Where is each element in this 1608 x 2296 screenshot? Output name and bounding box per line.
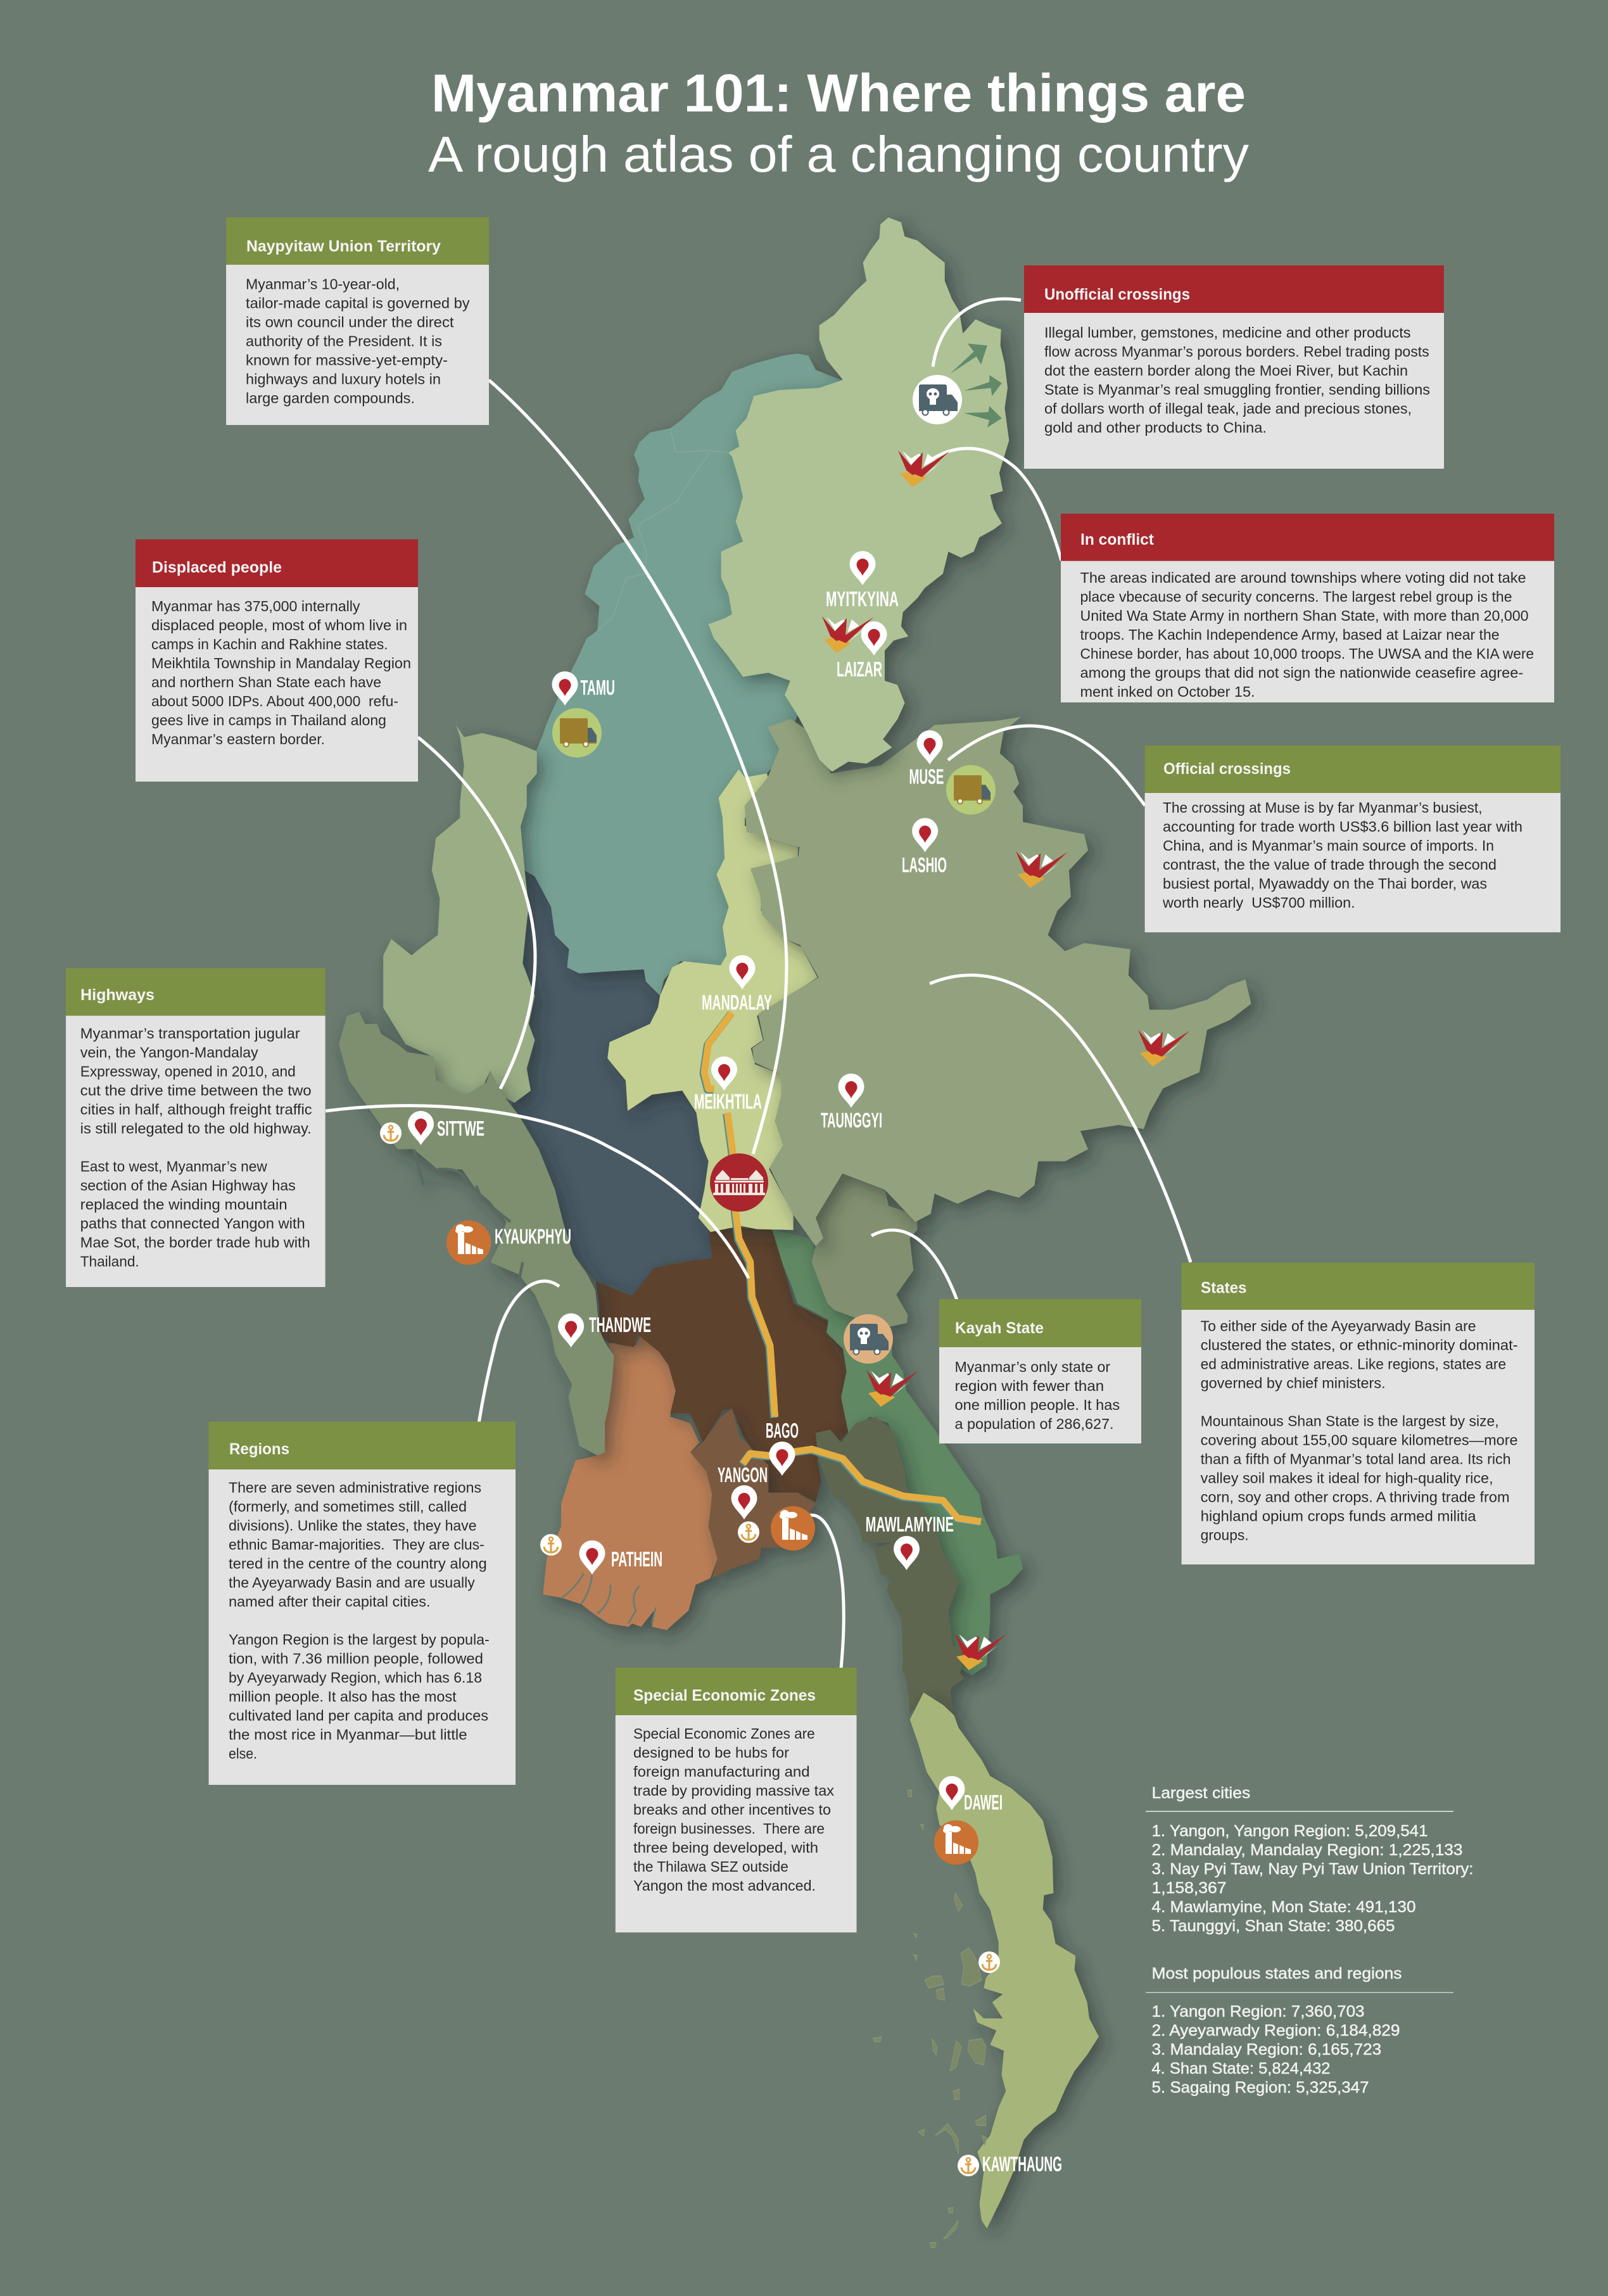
highways: [703, 1013, 981, 1523]
panel: Highways: [66, 968, 326, 1287]
city labels: MANDALAY: [702, 991, 772, 1014]
text: Displaced people body: and northern Shan State each have: [151, 674, 381, 690]
panel: Largest cities list: [1146, 1784, 1473, 1935]
city pins: [408, 551, 965, 1810]
text: Kayah State body: a population of 286,627.: [955, 1416, 1113, 1432]
text: States body: valley soil makes it ideal for high-quality rice,: [1201, 1470, 1493, 1487]
panel: Regions: [209, 1421, 516, 1785]
panel: Official crossings: [1145, 745, 1561, 932]
text: Unofficial crossings body: flow across Myanmar’s porous borders. Rebel trading posts: [1044, 343, 1429, 360]
panel: Most populous states and regions list: 3. Mandalay Region: 6,165,723: [1151, 2041, 1381, 2058]
text: Special Economic Zones body: foreign businesses. There are: [633, 1820, 825, 1837]
text: Unofficial crossings body: of dollars worth of illegal teak, jade and precious stones,: [1044, 400, 1412, 417]
text: Special Economic Zones body: [633, 1725, 834, 1894]
text: States body: corn, soy and other crops. A thriving trade from: [1201, 1489, 1510, 1506]
region: Magway: [510, 870, 712, 1295]
heading: States: States: [1201, 1279, 1246, 1297]
text: Special Economic Zones body: three being developed, with: [633, 1839, 818, 1856]
city labels: KYAUKPHYU: [495, 1225, 571, 1248]
text: In conflict body: [1080, 569, 1534, 700]
text: Naypyitaw body: its own council under the direct: [246, 314, 454, 331]
text: Kayah State body: [955, 1359, 1120, 1432]
panel: Largest cities list: 5. Taunggyi, Shan State: 380,665: [1151, 1917, 1395, 1935]
icon: unofficial truck, Kachin: [913, 375, 962, 424]
icon: anchors: [380, 1122, 1000, 2176]
panel: Most populous states and regions list: [1146, 1965, 1453, 2096]
text: Regions body: [229, 1479, 490, 1761]
text: Unofficial crossings body: dot the eastern border along the Moei River, but Kachin: [1044, 362, 1408, 379]
text: Naypyitaw body: tailor-made capital is governed by: [246, 295, 470, 312]
callout lines: [326, 299, 1191, 1668]
panel: Special Economic Zones: [616, 1668, 856, 1932]
panel: Largest cities list: 4. Mawlamyine, Mon State: 491,130: [1151, 1898, 1416, 1916]
panel: States: [1182, 1263, 1535, 1564]
text: Highways body: East to west, Myanmar’s new: [80, 1158, 268, 1174]
text: States body: highland opium crops funds armed militia: [1201, 1508, 1477, 1525]
text: Special Economic Zones body: foreign manufacturing and: [633, 1763, 810, 1780]
title: A rough atlas of a changing country: [428, 126, 1249, 182]
text: Official crossings body: contrast, the the value of trade through the second: [1163, 856, 1497, 873]
city labels: MUSE: [909, 765, 944, 788]
heading: Official crossings: Official crossings: [1163, 760, 1291, 778]
region: Bago: [596, 1227, 850, 1502]
text: Displaced people body: about 5000 IDPs. About 400,000 refu-: [151, 693, 398, 709]
text: States body: Mountainous Shan State is the largest by size,: [1201, 1413, 1499, 1430]
heading: In conflict: In conflict: [1080, 531, 1155, 549]
text: Regions body: Yangon Region is the largest by popula-: [229, 1631, 490, 1647]
text: Regions body: tion, with 7.36 million people, followed: [229, 1650, 483, 1666]
text: Displaced people body: displaced people, most of whom live in: [151, 617, 407, 633]
region: Mandalay: [607, 770, 818, 1232]
text: States body: [1201, 1318, 1518, 1544]
text: Naypyitaw body: large garden compounds.: [246, 390, 415, 407]
heading: Naypyitaw Union Territory: Naypyitaw Union Territory: [246, 238, 441, 255]
text: Official crossings body: China, and is Myanmar’s main source of imports. In: [1163, 837, 1494, 854]
title: Myanmar 101: Where things are: [431, 63, 1246, 123]
city labels: PATHEIN: [611, 1547, 662, 1571]
text: Kayah State body: Myanmar’s only state or: [955, 1359, 1110, 1375]
icon: SEZ factory Dawei: [934, 1820, 978, 1865]
heading: Regions: Regions: [229, 1440, 289, 1458]
text: States body: groups.: [1201, 1527, 1249, 1544]
text: Regions body: named after their capital cities.: [229, 1593, 431, 1609]
text: Naypyitaw body: known for massive-yet-empty-: [246, 352, 448, 369]
city labels: THANDWE: [589, 1313, 651, 1336]
text: Regions body: (formerly, and sometimes still, called: [229, 1498, 467, 1514]
text: In conflict body: troops. The Kachin Independence Army, based at Laizar near the: [1080, 626, 1500, 643]
city labels: TAMU: [580, 676, 615, 699]
text: Displaced people body: gees live in camps in Thailand along: [151, 712, 386, 728]
title: [428, 63, 1249, 182]
text: Special Economic Zones body: designed to be hubs for: [633, 1744, 789, 1761]
text: Naypyitaw body: authority of the President. It is: [246, 333, 442, 350]
text: Special Economic Zones body: Special Economic Zones are: [633, 1725, 815, 1742]
text: Regions body: the most rice in Myanmar—but little: [229, 1726, 467, 1742]
text: States body: ed administrative areas. Like regions, states are: [1201, 1356, 1506, 1373]
icon: capital building: [710, 1153, 768, 1212]
text: Official crossings body: accounting for trade worth US$3.6 billion last year with: [1163, 818, 1523, 835]
city labels: YANGON: [718, 1463, 768, 1487]
region: Kayah: [812, 1171, 917, 1327]
heading: Kayah State: Kayah State: [955, 1319, 1044, 1337]
map of Myanmar: [339, 217, 1251, 2247]
text: Kayah State body: region with fewer than: [955, 1378, 1104, 1394]
panel: Largest cities list: Largest cities: [1151, 1784, 1250, 1802]
text: In conflict body: The areas indicated are around townships where voting did not take: [1080, 569, 1526, 586]
panel: Displaced people: [136, 540, 418, 782]
text: In conflict body: ment inked on October 15.: [1080, 683, 1255, 700]
text: Displaced people body: Meikhtila Township in Mandalay Region: [151, 655, 411, 671]
city labels: MYITKYINA: [826, 587, 899, 611]
region: Ayeyarwady: [543, 1335, 718, 1630]
panel: Largest cities list: 1. Yangon, Yangon Region: 5,209,541: [1151, 1822, 1428, 1840]
text: Naypyitaw body: [246, 276, 470, 407]
text: Special Economic Zones body: trade by providing massive tax: [633, 1782, 834, 1799]
text: In conflict body: United Wa State Army in northern Shan State, with more than 20,000: [1080, 607, 1529, 624]
text: Kayah State body: one million people. It has: [955, 1397, 1120, 1413]
panel: Largest cities list: 2. Mandalay, Mandalay Region: 1,225,133: [1151, 1841, 1463, 1859]
text: Highways body: section of the Asian Highway has: [80, 1177, 296, 1193]
text: Unofficial crossings body: gold and other products to China.: [1044, 419, 1267, 436]
heading: Displaced people: Displaced people: [152, 559, 282, 576]
panel: Most populous states and regions list: 2. Ayeyarwady Region: 6,184,829: [1151, 2022, 1400, 2039]
text: Highways body: vein, the Yangon-Mandalay: [80, 1044, 258, 1060]
text: Official crossings body: The crossing at Muse is by far Myanmar’s busiest,: [1163, 799, 1482, 816]
text: Special Economic Zones body: breaks and other incentives to: [633, 1801, 831, 1818]
heading: Special Economic Zones: Special Economic Zones: [633, 1687, 816, 1704]
region: Chin: [383, 725, 537, 1103]
region: Rakhine: [339, 1012, 614, 1456]
text: Highways body: cities in half, although freight traffic: [80, 1101, 312, 1117]
text: Highways body: paths that connected Yangon with: [80, 1215, 305, 1231]
text: Official crossings body: worth nearly US$700 million.: [1162, 894, 1355, 911]
icon: conflict bursts: [822, 450, 1190, 1670]
heading: Unofficial crossings: Unofficial crossings: [1044, 286, 1190, 303]
text: Special Economic Zones body: the Thilawa SEZ outside: [633, 1858, 788, 1875]
city labels: MAWLAMYINE: [866, 1513, 954, 1536]
text: Official crossings body: [1162, 799, 1523, 911]
panel: Largest cities list: 3. Nay Pyi Taw, Nay Pyi Taw Union Territory:: [1151, 1860, 1473, 1878]
text: Special Economic Zones body: Yangon the most advanced.: [633, 1877, 816, 1894]
city labels: TAUNGGYI: [821, 1108, 882, 1132]
region: Sagaing: [521, 353, 843, 996]
text: Unofficial crossings body: State is Myanmar’s real smuggling frontier, sending billions: [1044, 381, 1430, 398]
region: Kachin: [709, 217, 1009, 771]
text: In conflict body: Chinese border, has about 10,000 troops. The UWSA and the KIA were: [1080, 645, 1534, 662]
text: Regions body: tered in the centre of the country along: [229, 1555, 487, 1571]
panel: Most populous states and regions list: 5. Sagaing Region: 5,325,347: [1151, 2079, 1369, 2096]
region: Mon: [816, 1417, 965, 1715]
text: Regions body: cultivated land per capita and produces: [229, 1707, 488, 1723]
text: Displaced people body: camps in Kachin and Rakhine states.: [151, 636, 388, 652]
panel: In conflict: [1061, 514, 1554, 702]
text: Displaced people body: Myanmar’s eastern border.: [151, 731, 325, 747]
icon: SEZ factory Thilawa: [771, 1506, 815, 1551]
text: In conflict body: place vbecause of security concerns. The largest rebel group is the: [1080, 588, 1512, 605]
text: Regions body: the Ayeyarwady Basin and are usually: [229, 1574, 475, 1590]
panel: Most populous states and regions list: 4. Shan State: 5,824,432: [1151, 2060, 1330, 2077]
city labels: LASHIO: [902, 853, 947, 877]
city labels: [437, 587, 1062, 2176]
text: Regions body: by Ayeyarwady Region, which has 6.18: [229, 1669, 482, 1685]
text: Unofficial crossings body: Illegal lumber, gemstones, medicine and other products: [1044, 324, 1411, 341]
text: Regions body: There are seven administrative regions: [229, 1479, 481, 1495]
city labels: DAWEI: [964, 1791, 1003, 1814]
heading: Highways: Highways: [80, 986, 155, 1004]
text: Unofficial crossings body: [1044, 324, 1430, 436]
region: Tanintharyi: [910, 1692, 1099, 2228]
text: States body: clustered the states, or ethnic-minority dominat-: [1201, 1337, 1518, 1354]
text: Naypyitaw body: Myanmar’s 10-year-old,: [246, 276, 400, 293]
text: Displaced people body: [151, 598, 411, 747]
panel: Naypyitaw Union Territory: [226, 217, 489, 425]
panel: Unofficial crossings: [1024, 265, 1444, 469]
text: In conflict body: among the groups that did not sign the nationwide ceasefire agree-: [1080, 664, 1523, 681]
text: Highways body: replaced the winding mountain: [80, 1196, 288, 1212]
text: Regions body: else.: [229, 1745, 257, 1761]
panel: Largest cities list: 1,158,367: [1151, 1879, 1226, 1897]
panel: Most populous states and regions list: 1. Yangon Region: 7,360,703: [1151, 2003, 1364, 2020]
text: Highways body: cut the drive time between the two: [80, 1082, 312, 1098]
icon: SEZ factory Kyaukphyu: [446, 1221, 491, 1265]
city labels: MEIKHTILA: [694, 1089, 762, 1113]
text: Highways body: Expressway, opened in 2010, and: [80, 1063, 296, 1079]
city labels: LAIZAR: [837, 657, 882, 681]
region: Kayin: [772, 1229, 1023, 1675]
icon: smuggling arrows: [950, 343, 1002, 428]
text: Naypyitaw body: highways and luxury hotels in: [246, 371, 441, 388]
text: Regions body: divisions). Unlike the states, they have: [229, 1517, 476, 1533]
text: States body: than a fifth of Myanmar’s total land area. Its rich: [1201, 1451, 1511, 1468]
city labels: SITTWE: [437, 1117, 484, 1140]
text: Regions body: ethnic Bamar-majorities. They are clus-: [229, 1536, 484, 1552]
text: Highways body: Myanmar’s transportation jugular: [80, 1025, 300, 1041]
text: Highways body: Mae Sot, the border trade hub with: [80, 1234, 310, 1250]
text: Regions body: million people. It also has the most: [229, 1688, 457, 1704]
text: Highways body: Thailand.: [80, 1253, 139, 1269]
text: Official crossings body: busiest portal, Myawaddy on the Thai border, was: [1163, 875, 1487, 892]
city labels: BAGO: [766, 1419, 799, 1442]
text: Displaced people body: Myanmar has 375,000 internally: [151, 598, 360, 614]
text: Highways body: [80, 1025, 312, 1269]
panel: Most populous states and regions list: Most populous states and regions: [1151, 1965, 1402, 1982]
islands: Myeik archipelago: [873, 1790, 987, 2247]
icon: unofficial truck, Kayah: [844, 1314, 893, 1364]
region: Yangon: [690, 1409, 816, 1578]
city labels: KAWTHAUNG: [982, 2152, 1062, 2176]
icon: official truck, Tamu: [552, 708, 602, 758]
text: States body: covering about 155,00 square kilometres—more: [1201, 1432, 1518, 1449]
panel: Kayah State: [939, 1299, 1141, 1443]
text: States body: To either side of the Ayeyarwady Basin are: [1201, 1318, 1476, 1335]
text: Highways body: is still relegated to the old highway.: [80, 1120, 312, 1136]
text: States body: governed by chief ministers.: [1201, 1375, 1386, 1392]
region: Shan: [745, 717, 1251, 1246]
icon: official truck, Muse: [946, 765, 996, 815]
